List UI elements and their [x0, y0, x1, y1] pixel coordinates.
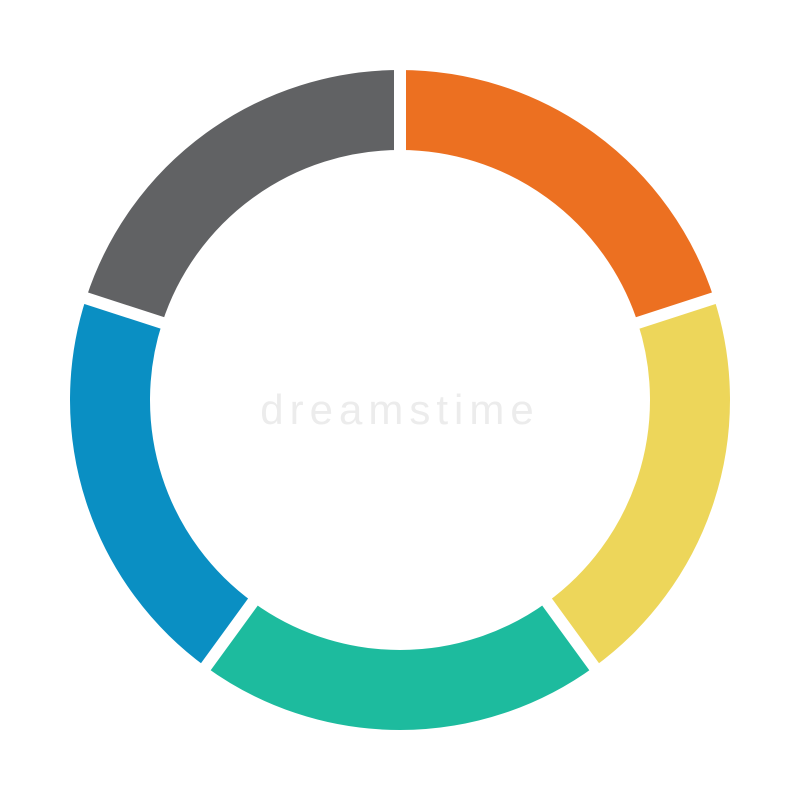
segment: yellow: [570, 310, 690, 635]
segment: teal: [230, 635, 570, 690]
segment: orange: [400, 110, 676, 310]
segment: blue: [110, 310, 230, 635]
watermark text: dreamstime: [260, 386, 540, 433]
segment: gray: [124, 110, 400, 310]
segment gaps: [67, 50, 733, 683]
